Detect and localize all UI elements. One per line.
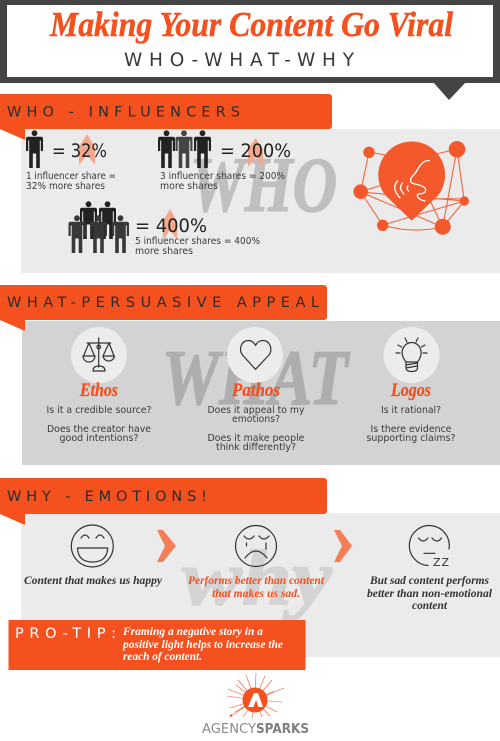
why ribbon	[0, 478, 327, 525]
column: pathos	[208, 327, 305, 453]
icon: influencer network	[353, 141, 469, 235]
column: logos: Is there evidence	[370, 424, 452, 435]
callout: pro tip	[8, 620, 306, 670]
column: logos: Is it rational?	[381, 405, 441, 416]
who watermark: WHO	[190, 141, 337, 228]
callout: pro tip: reach of content.	[123, 651, 202, 663]
column: sad: Performs better than content	[188, 575, 325, 587]
stat: three influencers: = 200%	[220, 140, 291, 162]
stat: three influencers: 3 influencer shares = 200%	[160, 171, 285, 182]
icon: sleeping face: ZZ	[433, 556, 449, 569]
title: Making Your Content Go Viral	[49, 5, 453, 44]
why ribbon: WHY - EMOTIONS!	[7, 489, 207, 505]
stat: one influencer: 32% more shares	[26, 181, 105, 192]
stat: three influencers: more shares	[160, 181, 218, 192]
header banner	[0, 0, 500, 100]
column: pathos: Does it appeal to my	[208, 405, 305, 416]
column: neutral: content	[412, 600, 448, 612]
column: neutral: But sad content performs	[369, 575, 490, 587]
who ribbon: WHO - INFLUENCERS	[7, 104, 240, 120]
column: ethos: Is it a credible source?	[46, 405, 152, 416]
column: logos	[366, 327, 456, 444]
icon: nose and sound waves	[395, 161, 429, 201]
stat: five influencers	[68, 201, 260, 257]
callout: pro tip: positive light helps to increase the	[122, 639, 283, 651]
what ribbon: WHAT-PERSUASIVE APPEAL	[7, 295, 319, 311]
column: ethos: Ethos	[79, 380, 118, 401]
logo: agency sparks: AGENCY	[202, 722, 256, 737]
column: pathos: Does it make people	[208, 433, 304, 444]
column: happy: Content that makes us happy	[24, 575, 163, 587]
stat: three influencers	[158, 130, 291, 192]
why watermark: why	[182, 534, 332, 621]
icon: scales	[83, 338, 114, 371]
icon: spark burst	[227, 673, 284, 718]
logo: agency sparks: SPARKS	[256, 721, 309, 737]
column: neutral	[367, 526, 493, 612]
column: pathos: think differently?	[216, 442, 296, 453]
column: ethos	[46, 327, 152, 444]
icon: happy face	[71, 525, 113, 567]
stat: one influencer: = 32%	[52, 140, 107, 162]
column: neutral: better than non-emotional	[367, 588, 493, 600]
column: sad	[188, 526, 325, 600]
column: ethos: good intentions?	[60, 433, 138, 444]
stat: one influencer	[26, 130, 116, 192]
icon: heart	[241, 340, 271, 369]
arrow: happy to sad	[157, 530, 176, 562]
column: logos: supporting claims?	[366, 433, 456, 444]
stat: five influencers: = 400%	[135, 215, 207, 237]
column: logos: Logos	[390, 380, 431, 401]
callout: pro tip: PRO-TIP:	[15, 626, 116, 642]
column: pathos: emotions?	[232, 414, 280, 425]
callout: pro tip: Framing a negative story in a	[122, 626, 263, 638]
who ribbon	[0, 94, 332, 140]
icon: sad face	[236, 526, 276, 566]
icon: light bulb	[396, 338, 427, 372]
panel: who	[0, 94, 500, 273]
column: happy	[24, 525, 163, 587]
panel: what	[0, 285, 500, 465]
column: pathos: Pathos	[231, 380, 280, 401]
logo: agency sparks	[202, 673, 309, 737]
stat: five influencers: more shares	[135, 246, 193, 257]
column: ethos: Does the creator have	[47, 424, 151, 435]
arrow: sad to neutral	[334, 530, 352, 562]
column: sad: that makes us sad.	[212, 588, 300, 600]
subtitle: WHO-WHAT-WHY	[124, 50, 355, 71]
panel: why	[0, 478, 500, 657]
what watermark: WHAT	[162, 334, 351, 421]
what ribbon	[0, 285, 327, 331]
stat: one influencer: 1 influencer share =	[26, 171, 116, 182]
stat: five influencers: 5 influencer shares = 400%	[135, 236, 260, 247]
